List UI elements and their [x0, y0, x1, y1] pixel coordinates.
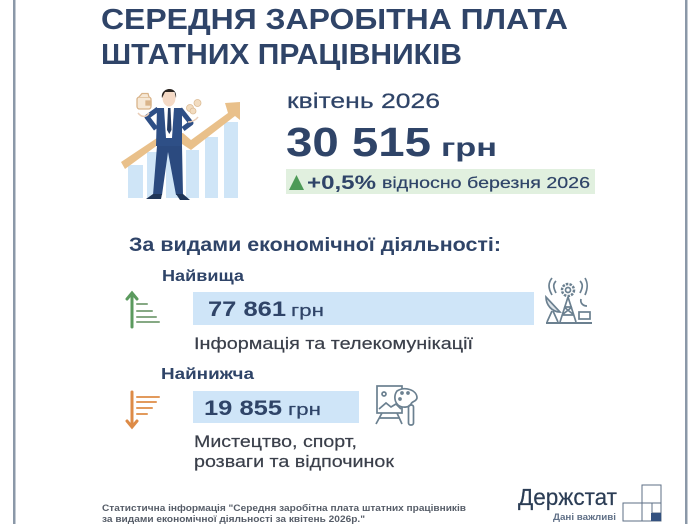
source note: Статистична інформація "Середня заробітна плата штатних працівників — [102, 503, 466, 514]
main value: 30 515 — [286, 119, 431, 165]
wallet — [137, 94, 151, 109]
lowest panel — [127, 366, 417, 471]
logo: Держстат: Дані важливі — [553, 512, 616, 523]
lowest category: Мистецтво, спорт, — [194, 433, 357, 451]
lowest label: Найнижча — [161, 366, 254, 383]
highest category: Інформація та телекомунікації — [194, 335, 473, 353]
title: СЕРЕДНЯ ЗАРОБІТНА ПЛАТА — [101, 4, 568, 36]
title — [101, 4, 568, 71]
highest value bar — [193, 292, 534, 325]
highest panel: 77 861 — [208, 298, 286, 321]
main value — [286, 119, 497, 165]
change badge — [286, 169, 595, 194]
main value: грн — [441, 132, 497, 162]
change badge: відносно березня 2026 — [382, 175, 590, 192]
illustration: businessman with growth chart — [121, 89, 240, 200]
icon: easel and palette — [376, 386, 417, 425]
lowest category — [194, 433, 395, 471]
lowest value bar — [193, 391, 359, 423]
logo: Держстат: Держстат — [518, 484, 617, 510]
highest panel: грн — [291, 302, 324, 320]
lowest panel: грн — [288, 401, 321, 419]
icon: ascending list — [127, 293, 159, 327]
source note — [102, 503, 466, 524]
highest panel — [127, 268, 592, 353]
period label: квітень 2026 — [287, 89, 440, 113]
highest label: Найвища — [162, 268, 244, 285]
section heading: За видами економічної діяльності: — [129, 234, 501, 256]
chart bars — [128, 122, 238, 198]
icon: telecommunications — [546, 278, 592, 323]
man — [138, 89, 198, 200]
change badge: +0,5% — [307, 172, 376, 194]
lowest category: розваги та відпочинок — [194, 453, 395, 471]
title: ШТАТНИХ ПРАЦІВНИКІВ — [101, 39, 462, 71]
logo: Держстат — [518, 484, 661, 523]
growth arrow — [121, 102, 240, 169]
icon: descending list — [127, 392, 159, 427]
coins — [186, 100, 201, 114]
lowest panel: 19 855 — [204, 397, 282, 420]
